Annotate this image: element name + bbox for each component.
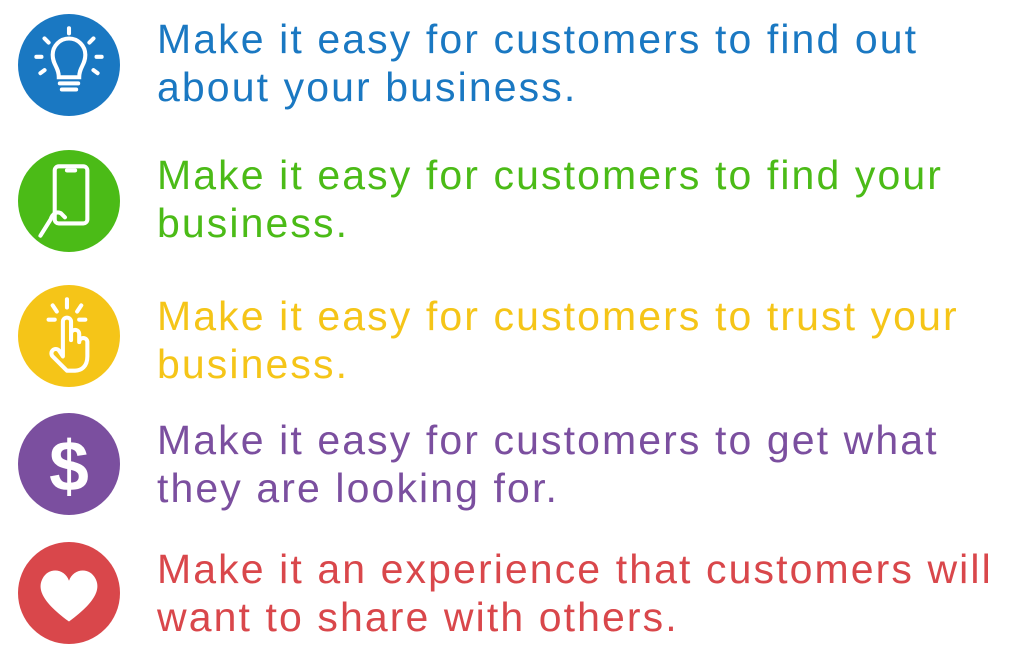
row 5: share <box>18 542 993 644</box>
text: trust: business. <box>157 341 349 387</box>
text: find business: business. <box>157 200 349 246</box>
icon: dollar <box>18 413 120 515</box>
text: find out: about your business. <box>157 64 577 110</box>
icon: phone <box>18 150 120 252</box>
text: find business: Make it easy for customers to find your <box>157 152 943 198</box>
icon: heart <box>18 542 120 644</box>
text: trust <box>157 293 959 387</box>
text: find business <box>157 152 943 246</box>
text: get what <box>157 417 939 511</box>
row 3: trust <box>18 285 959 387</box>
icon: tapping hand <box>18 285 120 387</box>
text: find out <box>157 16 918 110</box>
row 4: get what looking for <box>18 413 939 515</box>
text: get what: Make it easy for customers to get what <box>157 417 939 463</box>
text: find out: Make it easy for customers to find out <box>157 16 918 62</box>
row 2: find business <box>18 150 943 252</box>
text: share <box>157 546 993 640</box>
text: get what: they are looking for. <box>157 465 559 511</box>
row 1: find out about <box>18 14 918 116</box>
text: trust: Make it easy for customers to trust your <box>157 293 959 339</box>
icon: dollar: $ <box>49 427 89 507</box>
text: share: want to share with others. <box>157 594 679 640</box>
icon: light bulb <box>18 14 120 116</box>
text: share: Make it an experience that customers will <box>157 546 993 592</box>
